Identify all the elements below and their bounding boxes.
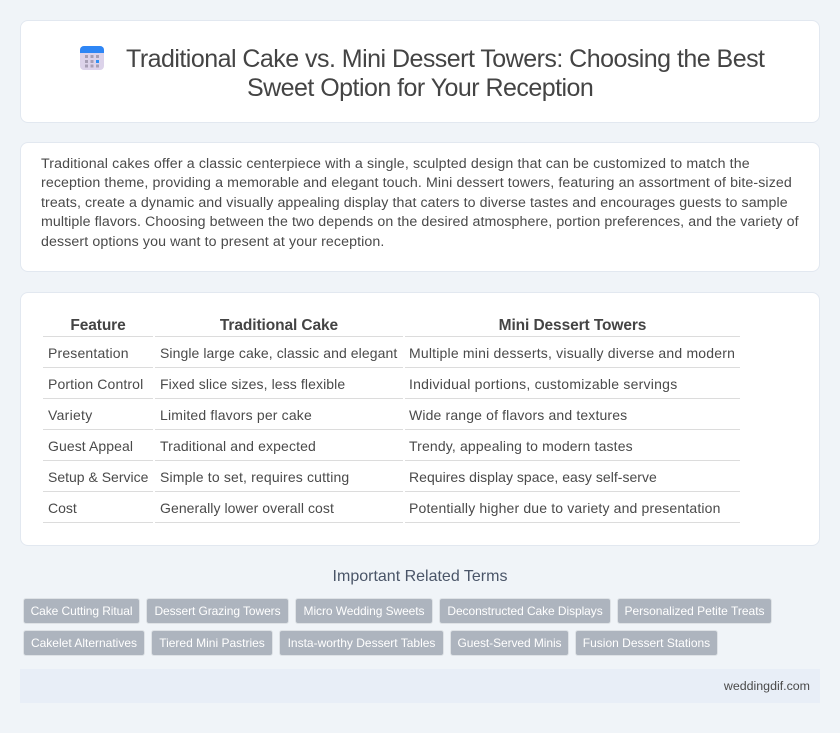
tag: [23, 630, 145, 656]
row: Guest Appeal: [48, 438, 633, 454]
tag: Dessert Grazing Towers: [154, 604, 281, 618]
tag: Tiered Mini Pastries: [159, 636, 265, 650]
row: Variety: Wide range of flavors and textures: [409, 407, 627, 423]
tag: [23, 598, 140, 624]
text block: intro: treats, create a dynamic and visually appealing display that caters to diverse tastes and encourages guests to sample: [41, 195, 788, 211]
tag: Insta-worthy Dessert Tables: [288, 636, 435, 650]
row: Presentation: Multiple mini desserts, visually diverse and modern: [409, 345, 735, 361]
tag: [575, 630, 718, 656]
heading: related terms: Important Related Terms: [333, 568, 507, 584]
row: Guest Appeal: Guest Appeal: [48, 438, 133, 454]
row: Setup & Service: Setup & Service: [48, 469, 148, 485]
panel: intro text: [20, 142, 820, 272]
row: Portion Control: Portion Control: [48, 376, 143, 392]
title: Traditional Cake vs. Mini Dessert Towers: Choosing the Best: [126, 45, 764, 73]
footer: [20, 669, 820, 703]
tag: Cakelet Alternatives: [31, 636, 137, 650]
row: Setup & Service: Requires display space, easy self-serve: [409, 469, 657, 485]
row: Cost: Potentially higher due to variety and presentation: [409, 500, 721, 516]
row: Setup & Service: [48, 469, 657, 485]
table header: Feature: Feature: [70, 317, 126, 334]
icon: calendar: [80, 46, 104, 70]
row: Guest Appeal: Traditional and expected: [160, 438, 316, 454]
tag: Deconstructed Cake Displays: [447, 604, 603, 618]
row: Presentation: [48, 345, 735, 361]
panel: comparison table: [20, 292, 820, 546]
table header: Traditional Cake: Traditional Cake: [220, 317, 338, 334]
tag: [151, 630, 273, 656]
row: Cost: Generally lower overall cost: [160, 500, 334, 516]
text block: intro: reception theme, providing a memorable and elegant touch. Mini dessert towers, featuring an assortment of bite-sized: [41, 175, 792, 191]
title line 2: Sweet Option for Your Reception: [247, 74, 593, 102]
row: Presentation: Presentation: [48, 345, 129, 361]
row: Portion Control: Individual portions, customizable servings: [409, 376, 677, 392]
tag: [439, 598, 611, 624]
row: Guest Appeal: Trendy, appealing to modern tastes: [409, 438, 633, 454]
tag: [279, 630, 444, 656]
row: Cost: Cost: [48, 500, 77, 516]
row: Portion Control: [48, 376, 677, 392]
tag: [450, 630, 569, 656]
tag: Micro Wedding Sweets: [304, 604, 424, 618]
row: Presentation: Single large cake, classic and elegant: [160, 345, 397, 361]
tag: [295, 598, 433, 624]
text block: intro: multiple flavors. Choosing between the two depends on the desired atmosphere, portion preferences, and the variety of: [41, 214, 799, 230]
row: Setup & Service: Simple to set, requires cutting: [160, 469, 349, 485]
table header: Mini Dessert Towers: Mini Dessert Towers: [499, 317, 646, 334]
tag: Personalized Petite Treats: [624, 604, 765, 618]
panel: title header: [20, 20, 820, 123]
row: Variety: Variety: [48, 407, 92, 423]
tag: Guest-Served Minis: [458, 636, 561, 650]
row: Cost: [48, 500, 721, 516]
text block: intro: [41, 156, 799, 250]
text block: intro: dessert options you want to present at your reception.: [41, 234, 384, 250]
row: Variety: Limited flavors per cake: [160, 407, 312, 423]
tag: Cake Cutting Ritual: [31, 604, 132, 618]
footer source text: weddingdif.com: [724, 679, 810, 693]
tag: [146, 598, 289, 624]
tag: Fusion Dessert Stations: [583, 636, 710, 650]
text block: intro: Traditional cakes offer a classic centerpiece with a single, sculpted design that can be customized to match the: [41, 156, 750, 172]
row: Portion Control: Fixed slice sizes, less flexible: [160, 376, 345, 392]
tag: [617, 598, 772, 624]
row: Variety: [48, 407, 627, 423]
